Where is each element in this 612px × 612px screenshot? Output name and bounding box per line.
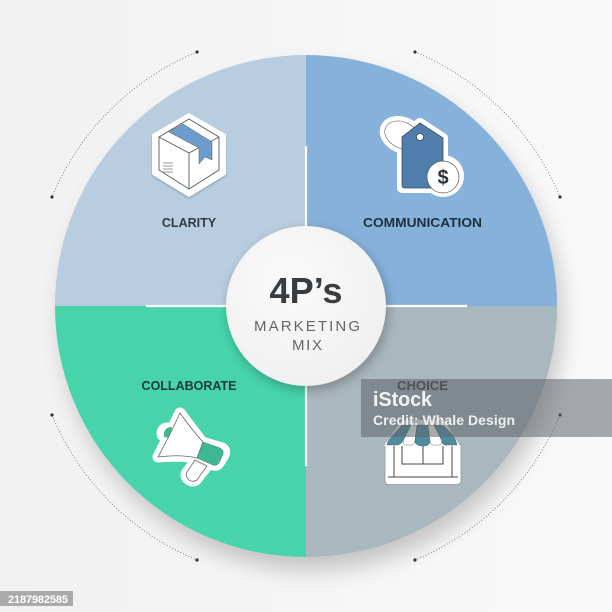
icon: megaphone	[158, 413, 225, 481]
panel: communication quadrant	[306, 55, 557, 306]
panel: clarity quadrant	[55, 55, 306, 306]
awning	[387, 425, 457, 446]
label: clarity: CLARITY	[162, 216, 217, 230]
image id badge: 2187982585	[8, 594, 68, 606]
hub title: 4P’s	[270, 270, 342, 311]
watermark band	[361, 379, 612, 437]
hub subtitle line 2: MIX	[292, 337, 322, 354]
panel: choice quadrant	[306, 306, 557, 557]
dotted arc: bottom left	[50, 413, 199, 562]
center hub circle	[226, 226, 386, 386]
divider lines	[146, 146, 467, 466]
label: collaborate: COLLABORATE	[142, 379, 236, 393]
panel: collaborate quadrant	[55, 306, 306, 557]
dotted arc: top left	[50, 50, 199, 199]
icon: box	[153, 114, 225, 198]
hub subtitle line 1: MARKETING	[254, 318, 360, 335]
dollar sign: $	[437, 167, 449, 189]
watermark logo text: iStock	[373, 389, 433, 411]
icon: storefront	[384, 420, 461, 484]
icon: price tag	[380, 116, 464, 197]
label: communication: COMMUNICATION	[363, 216, 482, 230]
dotted arc: bottom right	[413, 413, 562, 562]
image id badge	[0, 591, 73, 606]
label: choice: CHOICE	[397, 379, 448, 393]
watermark credit text: Credit: Whale Design	[373, 412, 515, 428]
dotted arc: top right	[413, 50, 562, 199]
